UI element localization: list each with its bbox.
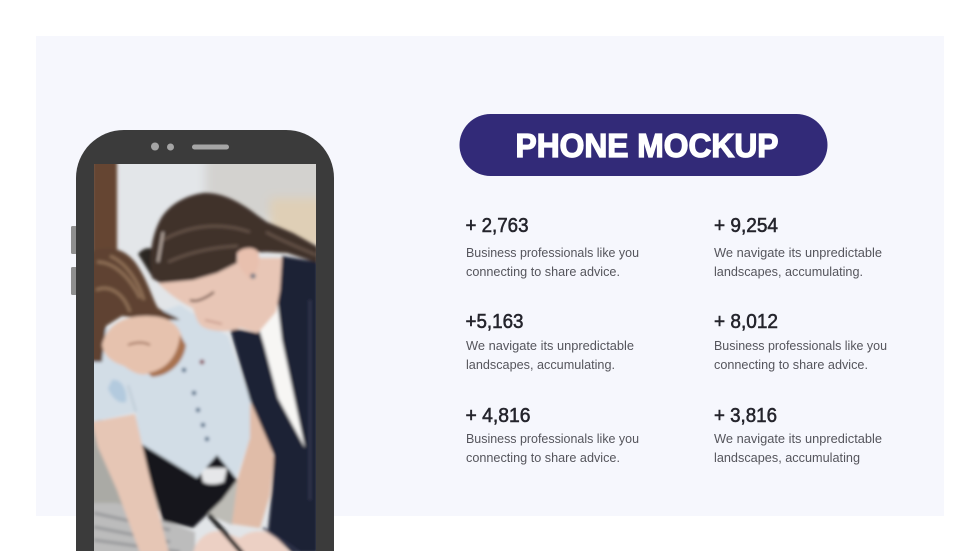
table (90, 503, 195, 551)
stat: 5,163: We navigate its unpredictable (466, 338, 634, 353)
stat: 3,816 (714, 405, 882, 465)
woman's jacket (230, 256, 318, 551)
stat: 4,816: Business professionals like you (466, 431, 639, 446)
stat: 2,763 (466, 215, 639, 279)
phone side buttons (71, 226, 77, 295)
stat: 5,163: +5,163 (466, 311, 524, 333)
ear and earring (234, 245, 261, 262)
stat: 9,254: + 9,254 (714, 215, 778, 237)
stat: 8,012: Business professionals like you (714, 338, 887, 353)
trousers (136, 440, 237, 528)
stat: 8,012: + 8,012 (714, 311, 778, 333)
man's hair (90, 248, 180, 362)
stat: 8,012 (714, 311, 887, 372)
pen (210, 516, 242, 551)
stat: 3,816: landscapes, accumulating (714, 450, 860, 465)
phone screen photo (90, 155, 325, 551)
stat: 9,254: We navigate its unpredictable (714, 245, 882, 260)
man's right arm (232, 402, 274, 528)
woman's small dark hair behind (138, 248, 154, 280)
title text: PHONE MOCKUP (516, 127, 778, 164)
stat: 3,816: + 3,816 (714, 405, 777, 427)
stat: 3,816: We navigate its unpredictable (714, 431, 882, 446)
stat: 2,763: connecting to share advice. (466, 264, 620, 279)
white shirt tail (200, 468, 227, 484)
man's face (102, 316, 184, 375)
man's shirt (90, 305, 251, 478)
floor (94, 422, 162, 510)
woman's hair (150, 193, 318, 283)
man's left arm (92, 414, 169, 551)
title pill (460, 114, 828, 176)
woman's neck and face (158, 258, 282, 333)
woman's blouse (255, 298, 305, 448)
stat: 5,163 (466, 311, 634, 372)
grey chair (205, 480, 239, 526)
stat: 5,163: landscapes, accumulating. (466, 357, 615, 372)
stat: 9,254: landscapes, accumulating. (714, 264, 863, 279)
man's hands (193, 531, 292, 551)
stat: 8,012: connecting to share advice. (714, 357, 868, 372)
stat: 4,816: connecting to share advice. (466, 450, 620, 465)
phone body (76, 130, 334, 551)
phone camera and speaker (151, 142, 229, 150)
stat: 2,763: Business professionals like you (466, 245, 639, 260)
shirt buttons (182, 368, 209, 441)
stat: 9,254 (714, 215, 882, 279)
phone mockup (71, 130, 334, 551)
stat: 2,763: + 2,763 (466, 215, 528, 237)
stat: 4,816: + 4,816 (466, 405, 530, 427)
stat: 4,816 (466, 405, 639, 465)
